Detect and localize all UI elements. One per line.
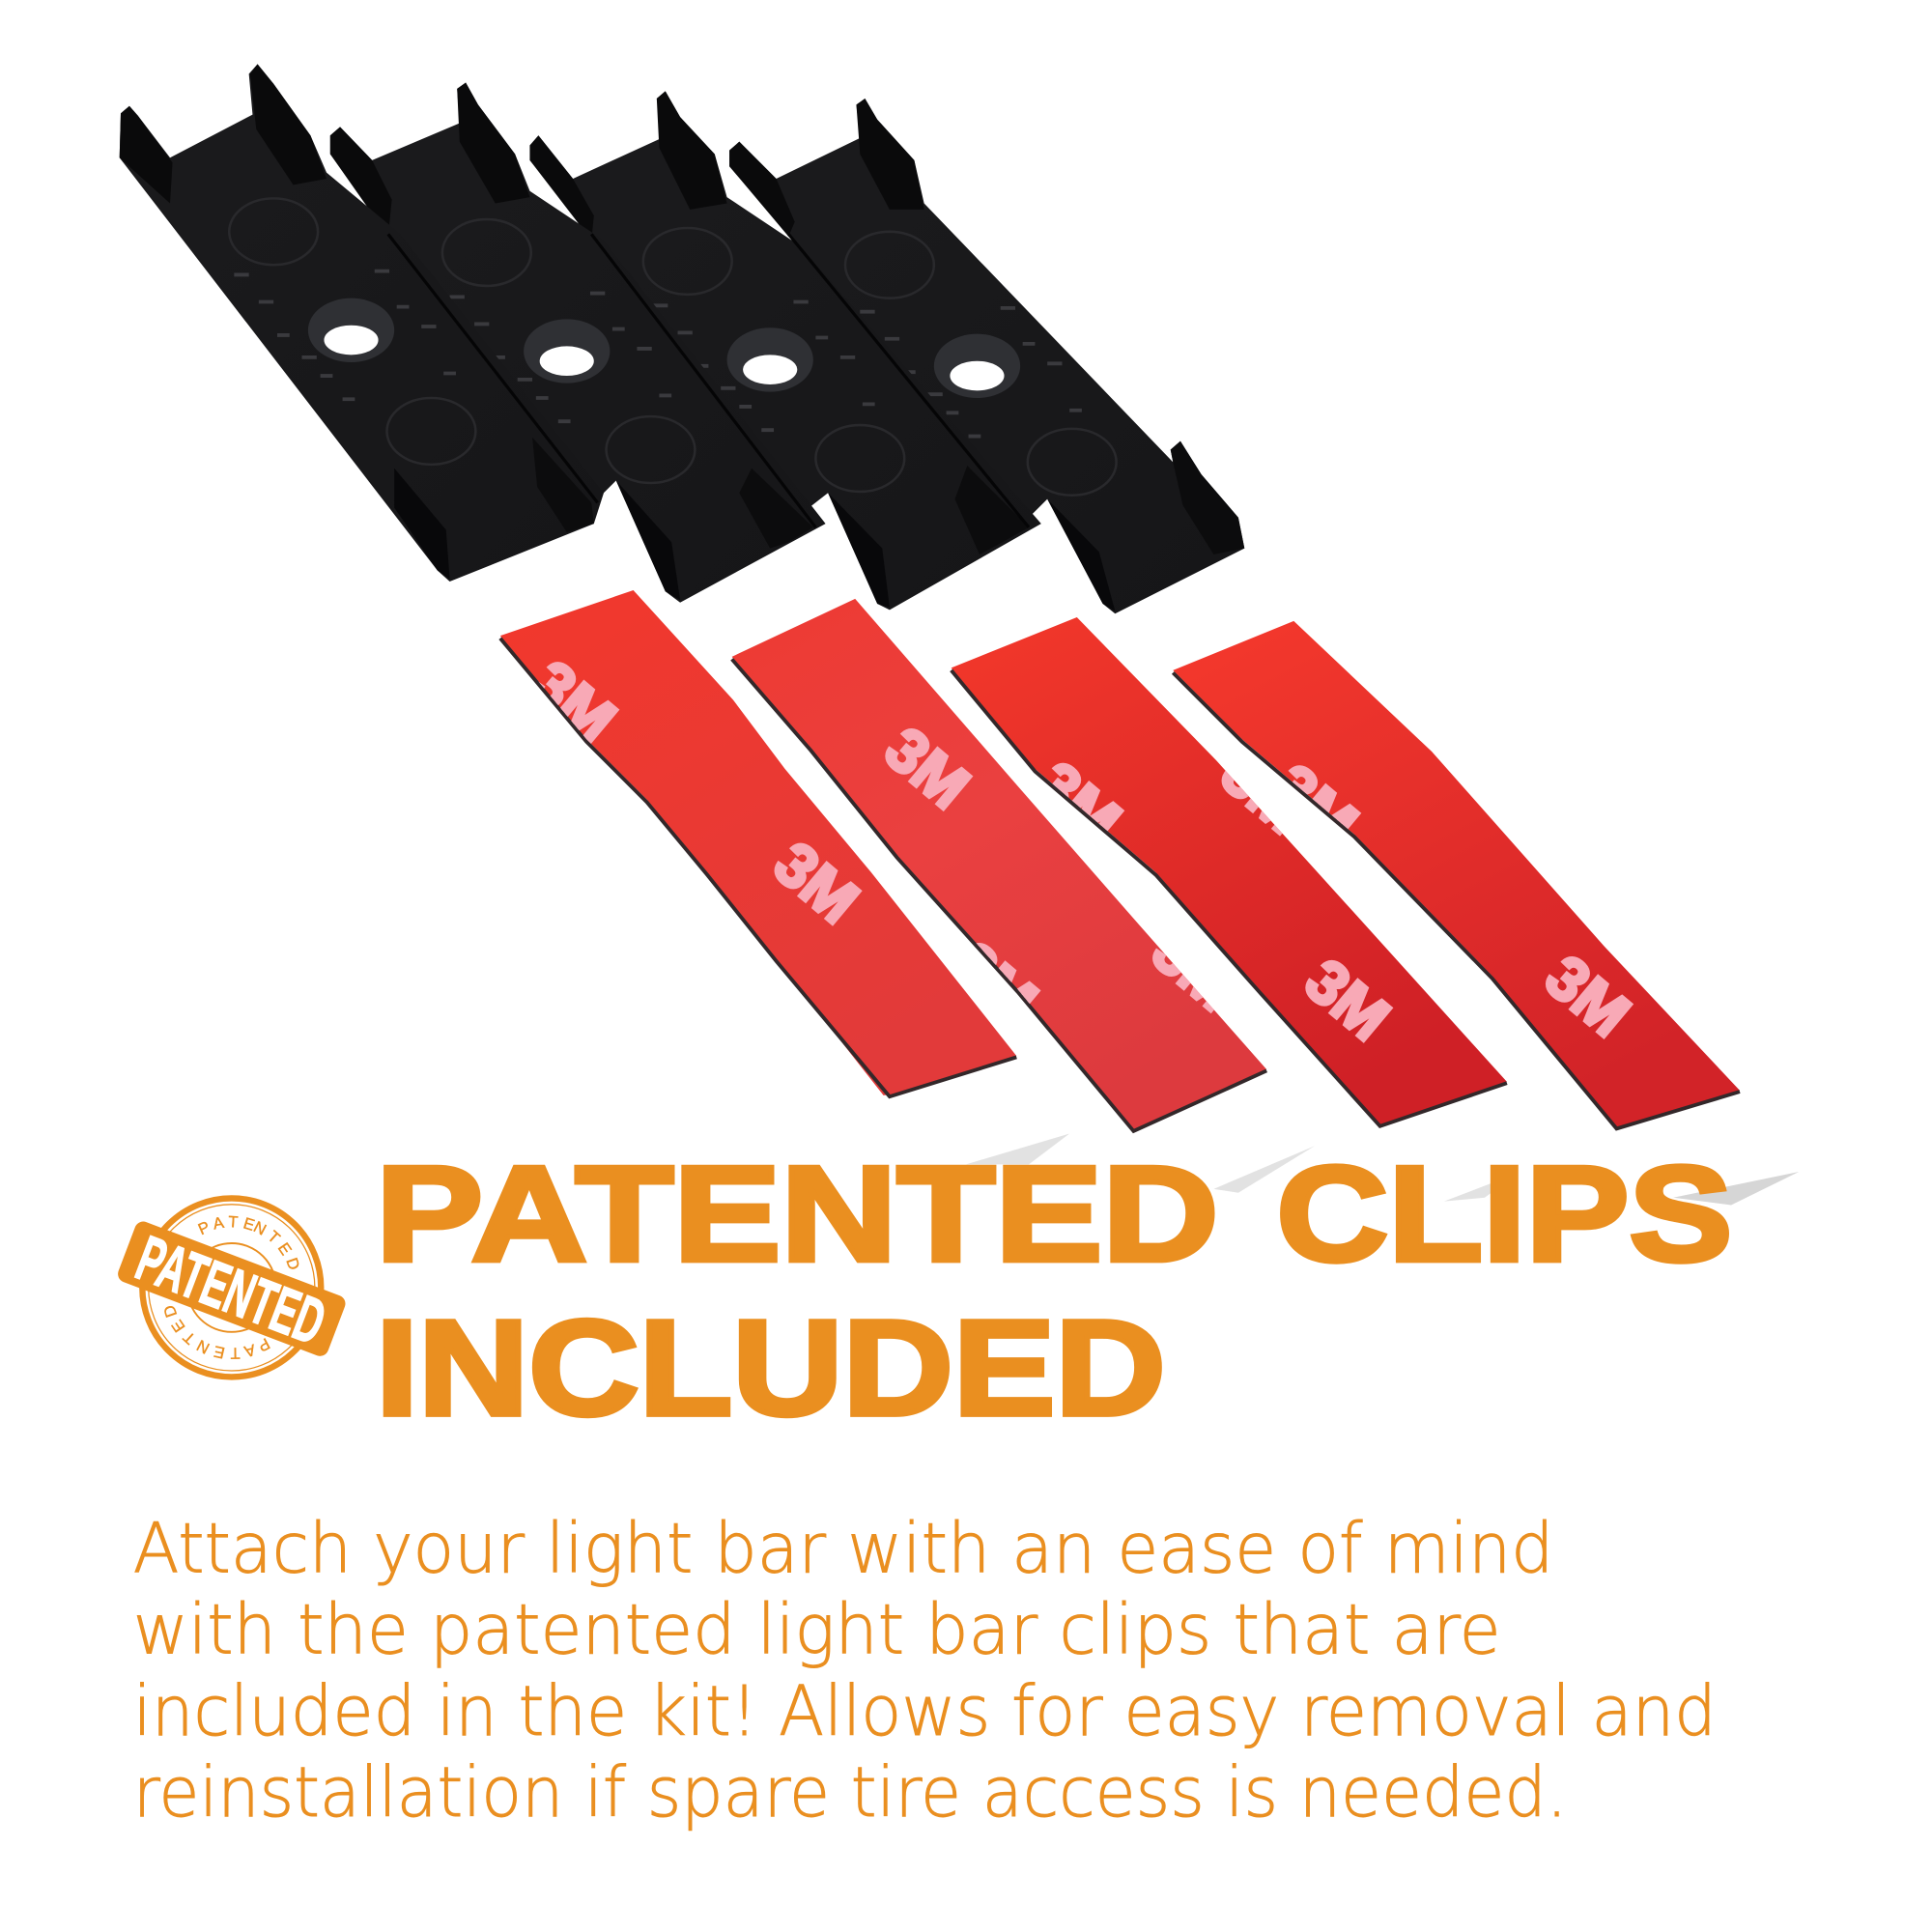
- strip 1: 3M: [519, 647, 629, 755]
- strip 2: 3M: [872, 714, 982, 822]
- body text: Attach your light bar with an ease of mind: [133, 1509, 1553, 1589]
- body text: [133, 1509, 1717, 1833]
- strip 2: 3M: [940, 928, 1050, 1037]
- title: PATENTED: [376, 1138, 1218, 1290]
- strip 1: [500, 590, 1016, 1096]
- strip 3: 3M: [1024, 748, 1134, 857]
- clip 2: [330, 82, 826, 603]
- clip 3: [529, 91, 1041, 610]
- photo: four red 3M adhesive strips: [500, 590, 1740, 1131]
- strip 4: 3M: [1261, 751, 1371, 859]
- photo: four black clips: [120, 64, 1244, 613]
- icon: patented stamp badge: [118, 1195, 346, 1380]
- strip 1: 3M: [761, 828, 871, 936]
- body text: reinstallation if spare tire access is needed.: [133, 1752, 1567, 1833]
- body text: with the patented light bar clips that are: [133, 1590, 1501, 1670]
- strip 4: 3M: [1533, 942, 1643, 1050]
- strip 3: [952, 617, 1507, 1126]
- title: CLIPS: [1276, 1138, 1732, 1290]
- strip 3: 3M: [1293, 946, 1403, 1054]
- icon: patented stamp badge: PATENTED: [128, 1223, 334, 1359]
- clip 4: [729, 99, 1244, 613]
- strip 2: 3M: [1140, 916, 1250, 1024]
- icon: patented stamp badge: PATENTED: [197, 1215, 255, 1235]
- strip 3: 3M: [1208, 738, 1319, 846]
- icon: patented stamp badge: PATENTED PATENTED: [164, 1221, 299, 1359]
- clip 1: [120, 64, 604, 582]
- strip 2: [732, 599, 1266, 1131]
- photo: liner shadows: [966, 1133, 1799, 1205]
- body text: included in the kit! Allows for easy removal and: [133, 1671, 1717, 1751]
- strip 4: [1173, 621, 1740, 1128]
- title: INCLUDED: [376, 1292, 1166, 1443]
- title: [376, 1138, 1732, 1443]
